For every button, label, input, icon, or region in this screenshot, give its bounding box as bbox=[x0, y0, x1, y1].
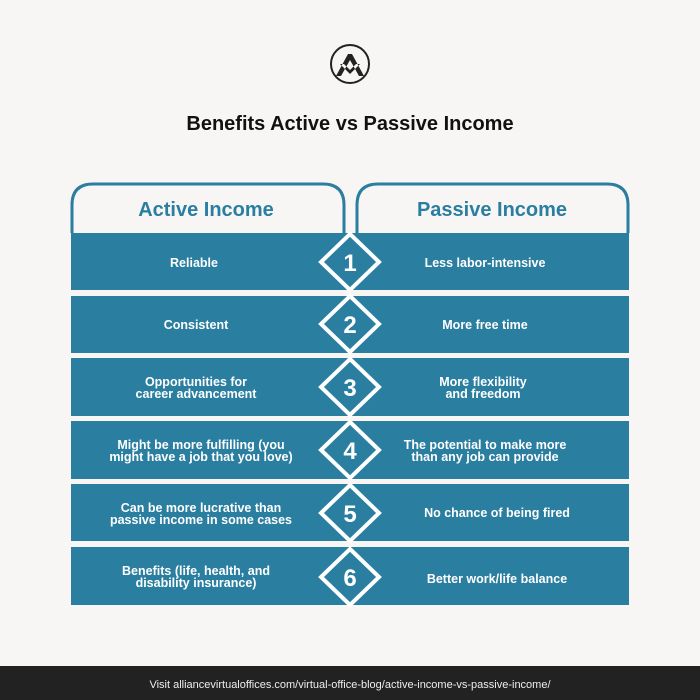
diamond 2: 2 bbox=[343, 312, 357, 339]
diamond 2 bbox=[321, 296, 379, 352]
row 3: career advancement bbox=[136, 387, 257, 401]
footer: Visit alliancevirtualoffices.com/virtual-office-blog/active-income-vs-passive-income/ bbox=[149, 679, 551, 691]
row 5: No chance of being fired bbox=[424, 506, 570, 520]
row 6: Better work/life balance bbox=[427, 572, 567, 586]
row 6 bbox=[71, 547, 629, 605]
row 4: than any job can provide bbox=[411, 450, 559, 464]
row 5 bbox=[71, 484, 629, 541]
diamond 4 bbox=[321, 422, 379, 478]
row 6: Benefits (life, health, and bbox=[122, 564, 270, 578]
row 1: Less labor-intensive bbox=[425, 256, 545, 270]
row 4: The potential to make more bbox=[404, 438, 566, 452]
row 4: Might be more fulfilling (you bbox=[117, 438, 285, 452]
row 3: Opportunities for bbox=[145, 375, 247, 389]
header: passive income: Passive Income bbox=[417, 199, 567, 221]
row 2: More free time bbox=[442, 318, 528, 332]
row 3: More flexibility bbox=[439, 375, 527, 389]
header: active income bbox=[72, 184, 344, 233]
row 2 bbox=[71, 296, 629, 353]
row 4: might have a job that you love) bbox=[109, 450, 293, 464]
diamond 4: 4 bbox=[343, 438, 357, 465]
row 3 bbox=[71, 358, 629, 416]
row 3: and freedom bbox=[445, 387, 521, 401]
row 1: Reliable bbox=[170, 256, 218, 270]
row 6: disability insurance) bbox=[136, 576, 256, 590]
diamond 5 bbox=[321, 485, 379, 541]
header: active income: Active Income bbox=[138, 199, 274, 221]
title: Benefits Active vs Passive Income bbox=[186, 113, 514, 135]
row 2: Consistent bbox=[164, 318, 229, 332]
diamond 6 bbox=[321, 549, 379, 605]
diamond 1: 1 bbox=[343, 250, 357, 277]
rows bbox=[71, 233, 629, 605]
footer bbox=[0, 666, 700, 700]
diamond 1 bbox=[321, 234, 379, 290]
diamond 3: 3 bbox=[343, 375, 357, 402]
row 5: Can be more lucrative than bbox=[121, 501, 281, 515]
header: passive income bbox=[357, 184, 628, 233]
row 5: passive income in some cases bbox=[110, 513, 292, 527]
row 1 bbox=[71, 233, 629, 290]
icon: logo bbox=[331, 45, 369, 83]
row 4 bbox=[71, 421, 629, 479]
number diamonds bbox=[321, 234, 379, 605]
diamond 3 bbox=[321, 359, 379, 415]
diamond 6: 6 bbox=[343, 565, 357, 592]
diamond 5: 5 bbox=[343, 501, 357, 528]
